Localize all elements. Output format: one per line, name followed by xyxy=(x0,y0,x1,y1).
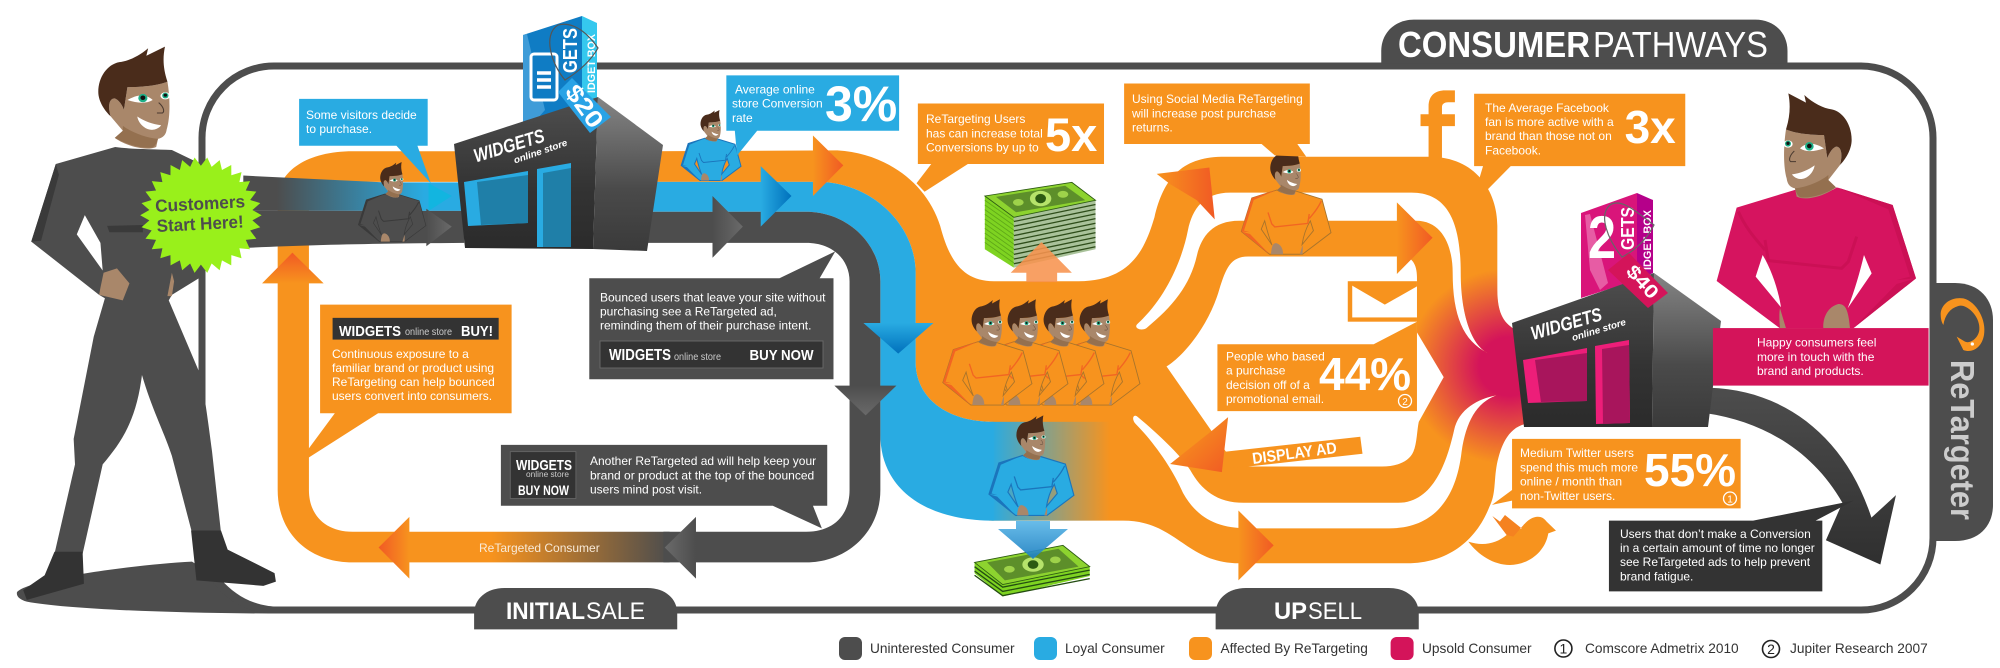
legend: Loyal Consumer xyxy=(1065,641,1165,656)
footnote marker 2: 2 xyxy=(1402,397,1408,408)
callout: 5x conversions: ReTargeting Users xyxy=(926,112,1025,126)
callout: 44% email: promotional email. xyxy=(1226,392,1324,406)
callout: conversion rate 3%: 3% xyxy=(825,76,897,132)
callout: brand fatigue: brand fatigue. xyxy=(1620,570,1693,584)
label: retargeted consumer: ReTargeted Consumer xyxy=(479,541,600,555)
callout: some visitors: Some visitors decide xyxy=(306,108,417,122)
footnote marker 1 xyxy=(1724,492,1736,506)
store: pink widgets: online store xyxy=(1571,317,1628,344)
initial sale tab: INITIAL xyxy=(506,598,585,625)
price tag: $20: $20 xyxy=(559,80,609,134)
callout: facebook 3x: fan is more active with a xyxy=(1485,115,1614,129)
icon: twitter bird xyxy=(1468,515,1556,565)
price tag: $40: $40 xyxy=(1621,261,1662,304)
product box: pink: GETS xyxy=(1617,207,1638,250)
callout: continuous exposure: Continuous exposure to a xyxy=(332,347,469,361)
legend: Uninterested Consumer xyxy=(870,641,1015,656)
product box: blue xyxy=(523,16,598,122)
icon: ReTargeter swirl xyxy=(1941,298,1984,351)
ground shadow xyxy=(17,562,286,614)
banner ad xyxy=(333,318,499,340)
upsell tab: UP xyxy=(1274,598,1307,625)
legend: Jupiter Research 2007 xyxy=(1790,641,1928,656)
upsell tab xyxy=(1216,588,1419,629)
callout: twitter 55%: online / month than xyxy=(1520,474,1622,488)
callout: facebook 3x: 3x xyxy=(1625,101,1676,153)
callout: 5x conversions: Conversions by up to xyxy=(926,140,1039,154)
store: blue widgets: WIDGETS xyxy=(471,126,548,167)
callout: conversion rate 3% xyxy=(726,75,899,156)
figure: loyal customer medium xyxy=(989,415,1074,515)
callout: facebook 3x: The Average Facebook xyxy=(1485,101,1610,115)
legend: 1 xyxy=(1560,640,1568,656)
product box: pink: 2 xyxy=(1588,204,1616,271)
callout: bounced users: reminding them of their purchase intent. xyxy=(600,318,811,332)
arrow: email branch xyxy=(1397,202,1433,274)
figure: upsold happy consumer xyxy=(1717,93,1916,328)
arrow: lower branch xyxy=(1238,510,1274,580)
loyal consumer blue flow xyxy=(646,182,1110,521)
callout: conversion rate 3%: Average online xyxy=(735,82,815,96)
arrow: left on orange loop xyxy=(379,517,409,579)
callout: brand fatigue: in a certain amount of time no longer xyxy=(1620,541,1815,555)
price tag: $40 xyxy=(1608,253,1668,308)
figure: social retargeted customer xyxy=(1241,147,1331,254)
arrow: up on orange loop xyxy=(262,253,324,283)
callout: 5x conversions: 5x xyxy=(1045,108,1097,161)
callout: facebook 3x xyxy=(1474,94,1685,190)
banner ad xyxy=(600,341,823,368)
callout: 44% email: a purchase xyxy=(1226,364,1286,378)
arrow: gray right xyxy=(713,196,743,258)
arrow: orange right xyxy=(813,135,843,196)
banner ad: online store xyxy=(674,352,721,363)
side tab: ReTargeter logo xyxy=(1933,283,1993,541)
arrow: display branch xyxy=(1170,417,1228,472)
callout: continuous exposure: ReTargeting can help bounced xyxy=(332,375,495,389)
callout: another retargeted ad xyxy=(501,445,827,528)
arrow: gray into store xyxy=(426,209,452,246)
display ad ribbon xyxy=(1217,437,1363,469)
callout: 44% email: 44% xyxy=(1319,348,1411,400)
square ad xyxy=(510,452,576,499)
legend: Comscore Admetrix 2010 xyxy=(1585,641,1739,656)
arrow: up to money xyxy=(1011,242,1072,282)
arrow: down to money xyxy=(998,521,1068,559)
callout: 44% email: decision off of a xyxy=(1226,378,1310,392)
callout: happy consumers band: Happy consumers feel xyxy=(1757,336,1876,350)
legend: Affected By ReTargeting xyxy=(1220,641,1368,656)
arrow: blue into store xyxy=(429,183,452,211)
arrow: social branch xyxy=(1157,167,1215,219)
callout: social media retargeting xyxy=(1124,84,1310,157)
callout: continuous exposure: familiar brand or product using xyxy=(332,361,494,375)
footnote marker 2 xyxy=(1398,394,1412,408)
callout: some visitors: to purchase. xyxy=(306,122,372,136)
callout: bounced users: Bounced users that leave your site without xyxy=(600,290,826,304)
callout: 5x conversions: has can increase total xyxy=(926,126,1043,140)
upsell tab: SELL xyxy=(1308,598,1362,625)
store: blue widgets: online store xyxy=(512,137,570,166)
icon: email envelope xyxy=(1348,281,1417,322)
product box: pink xyxy=(1581,193,1654,298)
callout: twitter 55%: non-Twitter users. xyxy=(1520,489,1615,503)
incoming beam from the customer xyxy=(243,176,464,248)
figure: main customer xyxy=(23,47,276,600)
product box: blue: GETS xyxy=(560,28,582,73)
legend: 2 xyxy=(1767,641,1775,657)
callout: 44% email: People who based xyxy=(1226,350,1325,364)
product box: pink: IDGET BOX xyxy=(1642,209,1654,270)
square ad: BUY NOW xyxy=(518,482,570,498)
callout: social media retargeting: Using Social Media ReTargeting xyxy=(1132,92,1303,106)
initial sale tab: SALE xyxy=(586,598,645,625)
callout: happy consumers band: more in touch with the xyxy=(1757,350,1875,364)
square ad: online store xyxy=(526,469,569,479)
callout: 44% email xyxy=(1217,322,1417,411)
callout: twitter 55% xyxy=(1492,439,1741,508)
retargeted consumer loop band xyxy=(278,151,670,562)
starburst badge: customers start here: Customers xyxy=(155,191,246,216)
banner ad: BUY NOW xyxy=(750,347,814,364)
callout: happy consumers band: brand and products. xyxy=(1757,364,1864,378)
arrow: blue down xyxy=(863,323,933,354)
legend xyxy=(839,637,1928,660)
money stack: upper xyxy=(985,182,1096,268)
store: blue widgets xyxy=(454,16,663,251)
starburst badge: customers start here xyxy=(140,158,262,273)
callout: continuous exposure xyxy=(308,305,512,458)
square ad: WIDGETS xyxy=(516,457,572,474)
icon: facebook f xyxy=(1421,90,1455,158)
starburst badge: customers start here: Start Here! xyxy=(156,211,244,236)
callout: brand fatigue: see ReTargeted ads to help prevent xyxy=(1620,555,1811,569)
callout: 5x conversions xyxy=(917,104,1104,192)
banner ad: online store xyxy=(405,327,452,338)
money stack: lower xyxy=(975,545,1090,597)
callout: brand fatigue xyxy=(1609,501,1854,591)
callout: some visitors xyxy=(299,99,431,183)
figure: loyal customer small xyxy=(681,110,741,180)
callout: conversion rate 3%: store Conversion xyxy=(732,97,823,111)
store: pink widgets xyxy=(1512,193,1721,427)
figure: group of four retargeted customers xyxy=(943,299,1140,405)
callout: twitter 55%: Medium Twitter users xyxy=(1520,446,1634,460)
callout: facebook 3x: Facebook. xyxy=(1485,144,1541,158)
initial sale tab xyxy=(474,588,677,629)
arrow: gray left xyxy=(665,517,696,579)
legend: Upsold Consumer xyxy=(1422,641,1532,656)
callout: bounced users xyxy=(589,251,835,379)
uninterested consumer gray loop xyxy=(646,212,880,562)
footnote marker 1: 1 xyxy=(1727,494,1733,506)
callout: another retargeted ad: Another ReTargeted ad will help keep your xyxy=(590,454,816,468)
banner ad: WIDGETS xyxy=(339,323,401,340)
title tab xyxy=(1381,20,1788,65)
product box: blue: IDGET BOX xyxy=(586,33,598,93)
pathway frame xyxy=(202,66,1933,610)
callout: another retargeted ad: users mind post visit. xyxy=(590,482,702,496)
callout: happy consumers band xyxy=(1713,328,1929,386)
callout: twitter 55%: 55% xyxy=(1644,444,1736,496)
banner ad: WIDGETS xyxy=(609,347,671,364)
callout: bounced users: purchasing see a ReTargeted ad, xyxy=(600,304,777,318)
title tab: CONSUMER xyxy=(1398,24,1590,65)
side tab: ReTargeter logo: ReTargeter xyxy=(1944,360,1981,520)
figure: customer gray small xyxy=(358,162,426,242)
title tab: PATHWAYS xyxy=(1593,24,1768,65)
orange flow: affected by retargeting xyxy=(646,150,1538,563)
store: pink widgets: WIDGETS xyxy=(1529,304,1605,345)
arrow: exit curve xyxy=(1706,388,1896,565)
callout: twitter 55%: spend this much more xyxy=(1520,460,1638,474)
callout: conversion rate 3%: rate xyxy=(732,111,753,125)
arrow: blue right xyxy=(761,166,792,227)
callout: social media retargeting: returns. xyxy=(1132,120,1173,134)
banner ad: BUY! xyxy=(461,323,493,340)
callout: social media retargeting: will increase post purchase xyxy=(1131,106,1276,120)
arrow: gray down xyxy=(834,386,896,415)
callout: facebook 3x: brand than those not on xyxy=(1485,129,1612,143)
callout: another retargeted ad: brand or product at the top of the bounced xyxy=(590,468,814,482)
callout: brand fatigue: Users that don’t make a Conversion xyxy=(1620,527,1811,541)
display ad ribbon: DISPLAY AD xyxy=(1251,440,1338,468)
callout: continuous exposure: users convert into consumers. xyxy=(332,389,492,403)
